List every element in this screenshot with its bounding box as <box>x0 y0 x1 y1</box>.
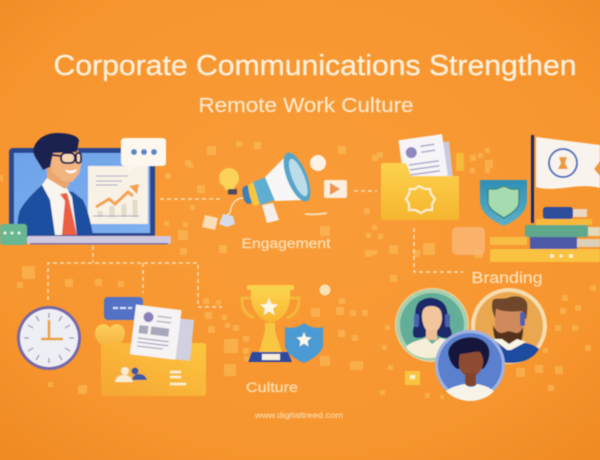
avatar: woman with headset <box>395 288 469 362</box>
icon: folder with documents <box>381 134 464 220</box>
icon: green shield <box>480 180 527 226</box>
avatar: bearded man with headset <box>471 288 547 364</box>
chat bubble <box>121 138 166 172</box>
dashed connectors <box>48 191 463 307</box>
icon: blue star shield <box>285 323 323 363</box>
small yellow note tile <box>405 371 420 385</box>
swoosh mark <box>305 213 327 214</box>
label: Branding: Branding <box>472 270 542 287</box>
person <box>17 133 93 235</box>
icon: video card <box>324 180 347 198</box>
icon: trophy <box>242 285 299 362</box>
avatar: woman with curly hair <box>435 330 505 401</box>
subtitle: Remote Work Culture <box>198 94 414 117</box>
small green bubble <box>0 224 27 245</box>
website credit: www.digitaltreed.com <box>254 411 343 420</box>
icon: megaphone <box>242 149 316 223</box>
chart sheet <box>88 166 148 224</box>
icon: flag and books <box>490 135 600 262</box>
icon: wall clock <box>17 306 81 370</box>
icon: white circle <box>310 155 326 171</box>
icon: presenter on laptop <box>0 133 171 245</box>
icon: blue chat tag <box>104 297 143 320</box>
rounded translucent tile <box>452 227 485 255</box>
decorative squares <box>0 141 596 399</box>
title: Corporate Communications Strengthen <box>54 50 576 82</box>
icon: heart <box>95 324 125 352</box>
books <box>543 207 573 219</box>
label: Engagement: Engagement <box>242 235 331 251</box>
label: Culture: Culture <box>246 379 298 395</box>
icon: card with people and documents <box>101 304 206 396</box>
laptop base <box>27 236 171 244</box>
icon: small chart mark <box>320 284 330 296</box>
icon: megaphone cord and plug <box>202 198 243 230</box>
icon: light bulb <box>219 168 239 194</box>
